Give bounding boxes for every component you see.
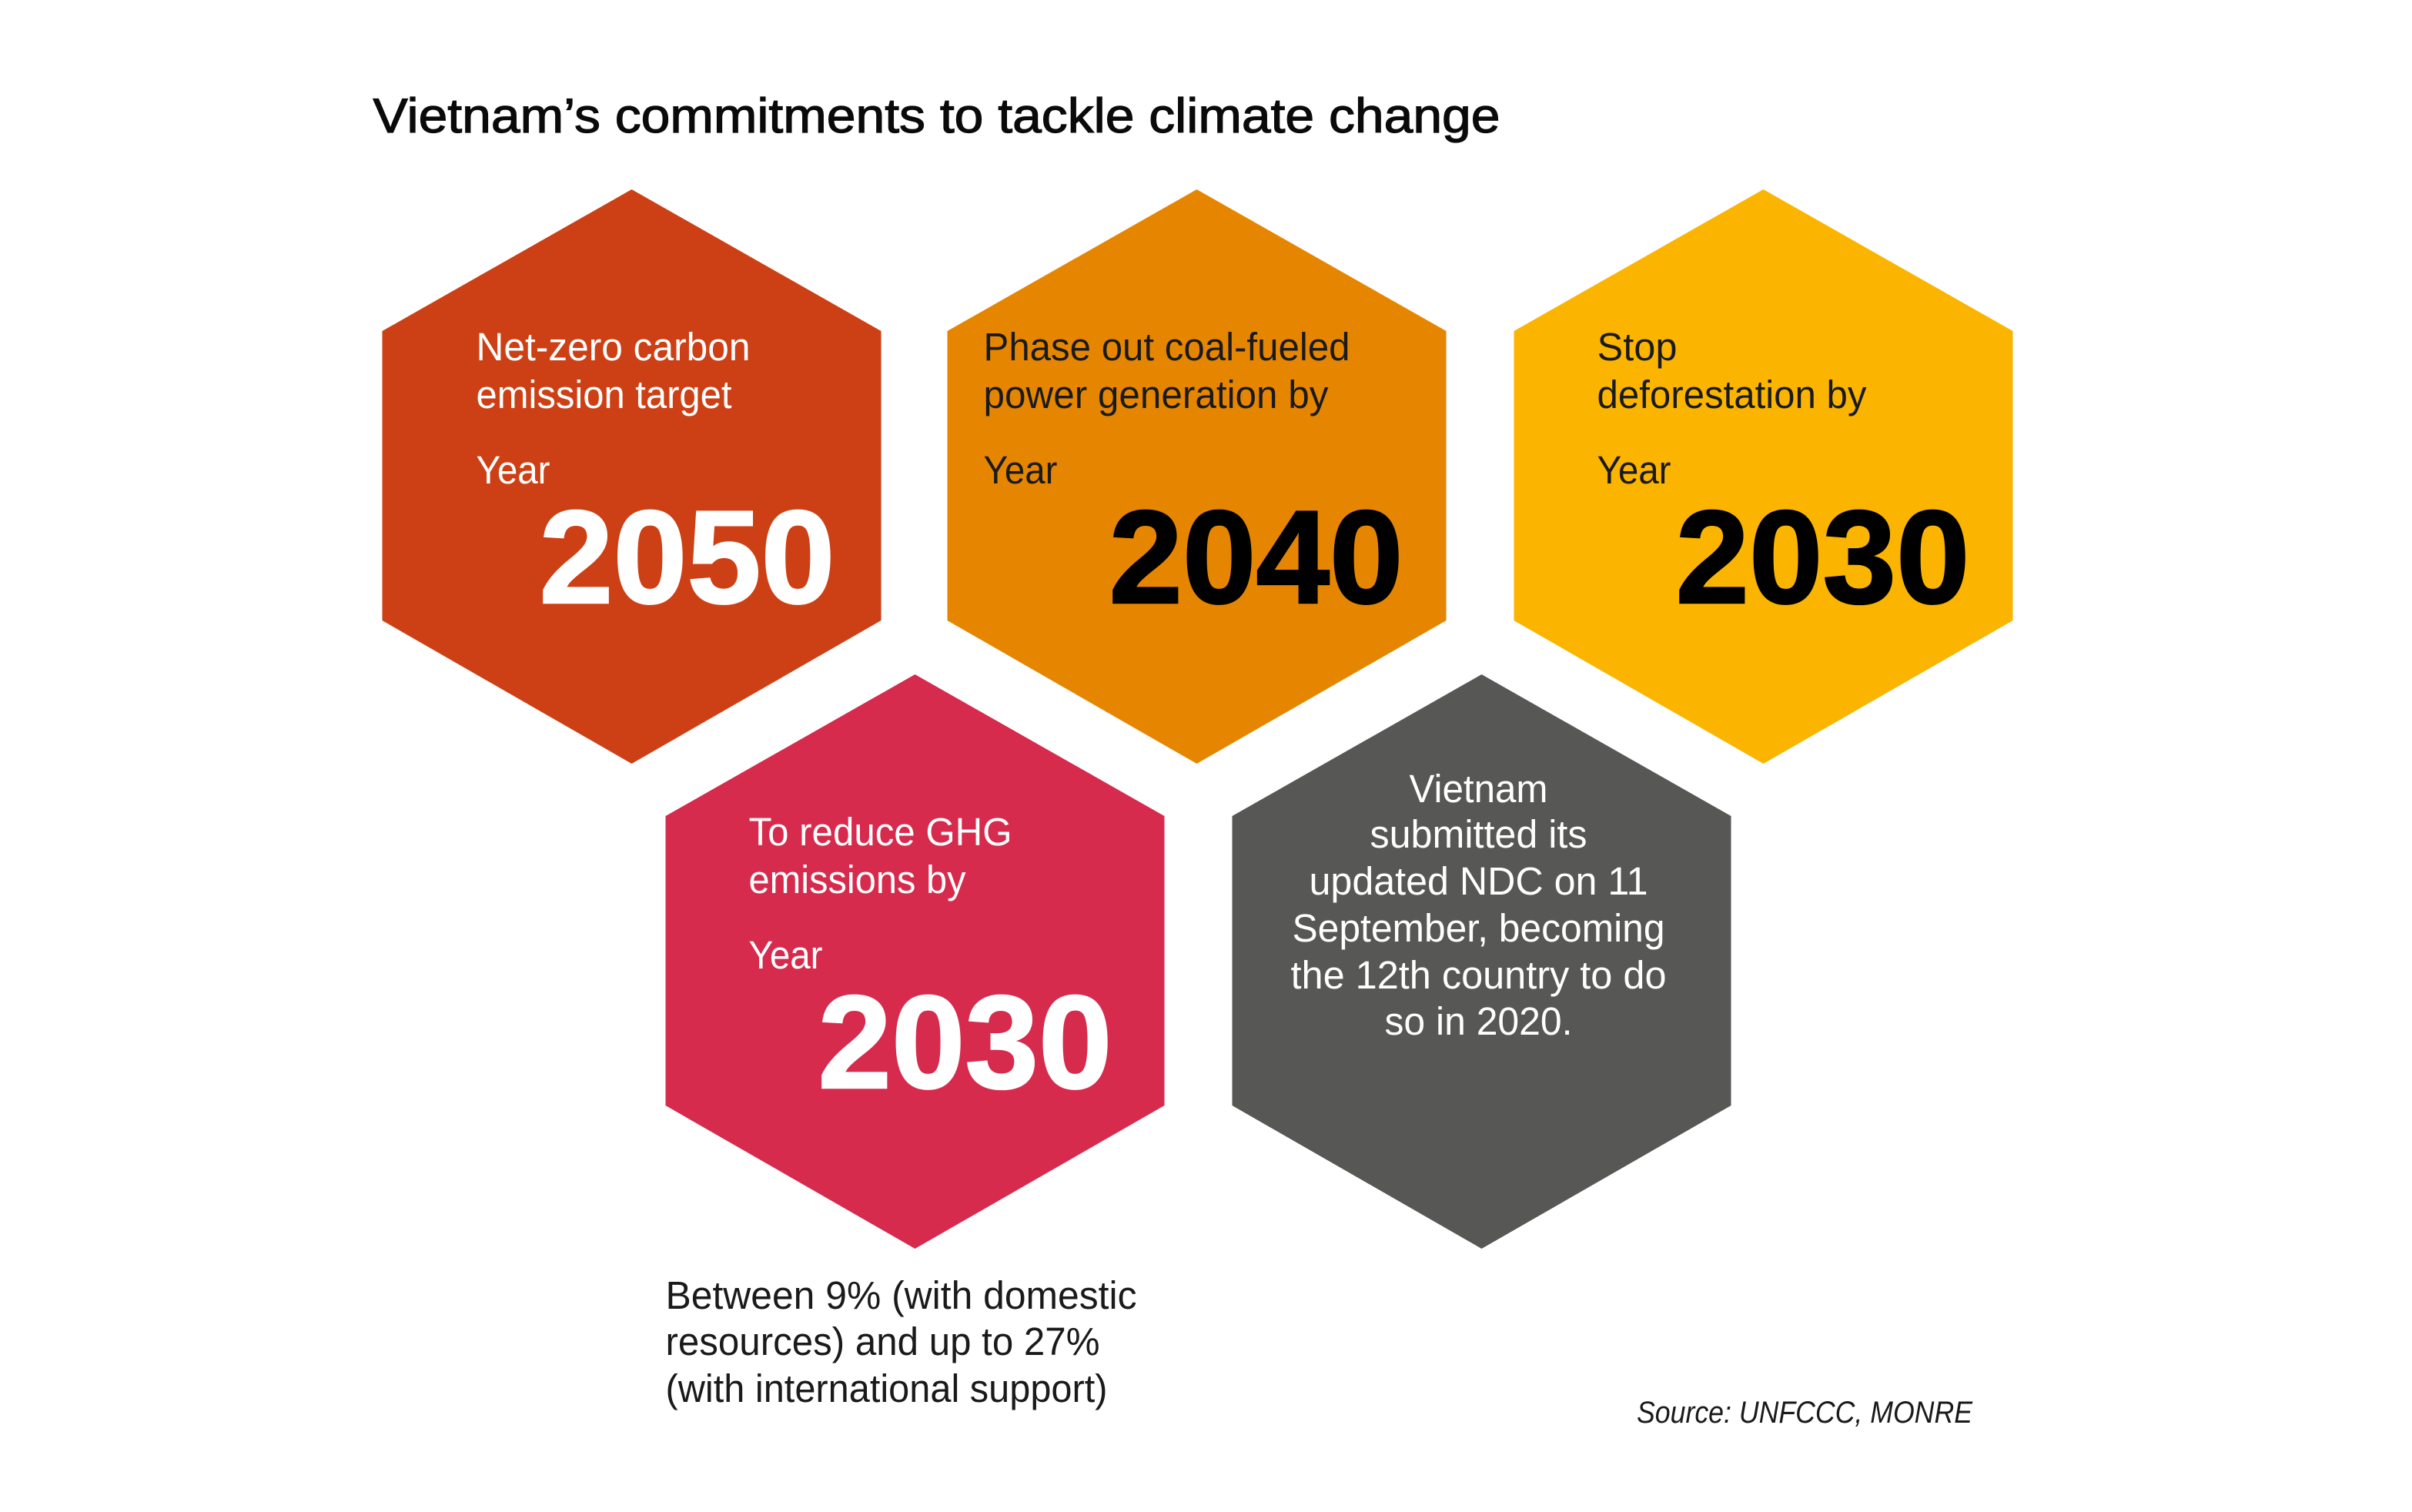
text: NDC description: Vietnam: [1409, 767, 1547, 811]
text: GHG description: To reduce GHG: [748, 810, 1012, 854]
text: GHG range note: (with international support): [665, 1366, 1107, 1410]
hexagon: net-zero: [382, 189, 881, 764]
text: coal description: power generation by: [984, 373, 1329, 416]
text: deforestation description: Stop: [1597, 325, 1677, 369]
text: coal description: Phase out coal-fueled: [984, 325, 1350, 369]
text: NDC description: September, becoming: [1292, 906, 1664, 950]
text: NDC description: updated NDC on 11: [1309, 859, 1648, 903]
source note: Source: UNFCCC, MONRE: [1637, 1396, 1973, 1430]
panel: reduce GHG emissions 2030: [665, 674, 1164, 1249]
label: year: Year: [748, 933, 823, 977]
hexagon: deforestation: [1514, 189, 2012, 764]
label: year: Year: [1597, 448, 1671, 492]
text: GHG description: emissions by: [748, 858, 966, 902]
text: net-zero description: emission target: [476, 373, 731, 416]
label: year: Year: [984, 448, 1058, 492]
text: GHG range note: Between 9% (with domestic: [665, 1273, 1136, 1317]
panel: net-zero carbon emission target 2050: [382, 189, 881, 764]
text: NDC description: submitted its: [1370, 812, 1587, 856]
text: net-zero description: Net-zero carbon: [476, 325, 750, 369]
panel: NDC submission: [1232, 674, 1731, 1249]
number: 2030: 2030: [1675, 483, 1969, 631]
text: GHG range note: resources) and up to 27%: [665, 1320, 1099, 1363]
hexagon: NDC: [1232, 674, 1731, 1249]
text: NDC description: the 12th country to do: [1290, 953, 1666, 997]
panel: stop deforestation 2030: [1514, 189, 2012, 764]
hexagon: GHG: [665, 674, 1164, 1249]
label: year: Year: [476, 448, 550, 492]
number: 2030: 2030: [818, 968, 1112, 1116]
title: Vietnam’s commitments to tackle climate change: [373, 89, 1500, 143]
panel: phase out coal-fueled power 2040: [947, 189, 1446, 764]
text: NDC description: so in 2020.: [1384, 999, 1572, 1043]
number: 2040: 2040: [1109, 483, 1403, 631]
text: deforestation description: deforestation by: [1597, 373, 1867, 416]
number: 2050: 2050: [539, 483, 835, 631]
hexagon: coal: [947, 189, 1446, 764]
